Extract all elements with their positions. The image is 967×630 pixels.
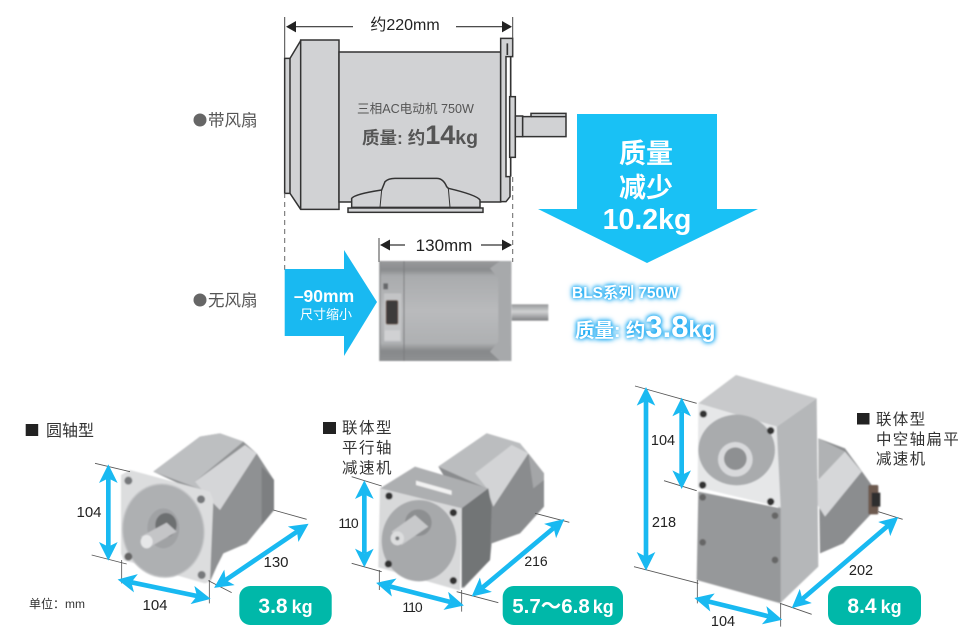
dimension: 130mm: 130mm [416,236,472,255]
front plate [378,488,462,591]
label: 216 length: 216 [524,553,548,569]
motor: fan-cooled three-phase AC motor [285,38,566,212]
dimensions: parallel shaft gearmotor [352,477,569,612]
label: 202 length: 202 [849,563,873,579]
motor body [153,433,274,582]
label: 104 width: 104 [142,597,168,614]
mounting holes [124,477,132,485]
gear head top [380,467,488,508]
product: hollow shaft flat gearmotor [697,375,880,603]
motor body [818,438,872,553]
gear case [777,398,818,603]
label: 104 upper height: 104 [651,433,675,449]
shaft [141,523,177,546]
arrow: mass reduction [538,114,758,263]
heading: hollow shaft flat gearmotor: 联体型 [876,410,926,428]
badge: 3.8 kg: 3.8kg [258,595,313,618]
heading: parallel shaft gearmotor: 平行轴 [342,439,393,457]
dimension: 130mm [379,236,512,262]
heading: hollow shaft flat gearmotor: 减速机 [876,450,926,468]
label: 218 total height: 218 [652,515,676,531]
motor: BLS series without fan [379,261,548,361]
front plate [121,470,213,583]
heading: parallel shaft gearmotor [323,419,393,477]
arrow: mass reduction: 质量 [619,139,673,169]
label: 104 height: 104 [76,504,102,521]
front lower plate [697,492,781,603]
front upper plate [698,403,781,507]
heading: hollow shaft flat gearmotor: 中空轴扁平 [876,430,960,448]
product: parallel shaft gearmotor [378,433,544,591]
note: unit: 单位：mm [29,596,85,611]
label: 130 length: 130 [263,554,289,571]
label: without fan: 无风扇 [208,291,258,310]
heading: round shaft type: 圆轴型 [46,422,94,440]
dimension: 220mm [285,16,513,270]
holes [700,410,707,418]
badge: 8.4 kg: 8.4kg [847,595,902,618]
arrow: size reduction: 尺寸缩小 [300,307,352,322]
label: 110 width: 110 [402,599,423,615]
arrow: mass reduction: 减少 [619,173,673,203]
connector [868,485,878,514]
dimension: 220mm: 约220mm [370,16,440,34]
heading: parallel shaft gearmotor: 减速机 [342,459,393,477]
text: BLS series mass: 质量: 约3.8kg [575,309,715,344]
badge: 5.7-6.8 kg: 5.7～6.8kg [512,595,614,618]
label: with fan: 带风扇 [208,111,258,130]
shaft [405,509,432,536]
arrow: size reduction [285,250,377,356]
badge: 5.7-6.8 kg [503,586,623,625]
dimensions: hollow shaft flat gearmotor [634,386,903,627]
text: BLS series name: BLS系列 750W [572,284,679,302]
label: 104 width: 104 [711,614,735,630]
motor body [438,433,544,588]
dimensions: round shaft motor [92,463,307,603]
arrow: mass reduction: 10.2kg [603,204,691,236]
text: motor name: 三相AC电动机 750W [357,102,474,116]
badge: 3.8 kg [239,586,332,625]
mounting holes [385,492,393,500]
badge: 8.4 kg [828,586,921,625]
gear head side [462,488,492,588]
text: motor mass: 质量: 约14kg [362,120,478,150]
heading: round shaft type [26,422,94,440]
label: 110 height: 110 [338,515,359,531]
arrow: size reduction: –90mm [294,286,354,306]
product: round shaft motor [117,433,274,583]
heading: parallel shaft gearmotor: 联体型 [342,419,393,437]
heading: hollow shaft flat gearmotor [857,410,960,468]
